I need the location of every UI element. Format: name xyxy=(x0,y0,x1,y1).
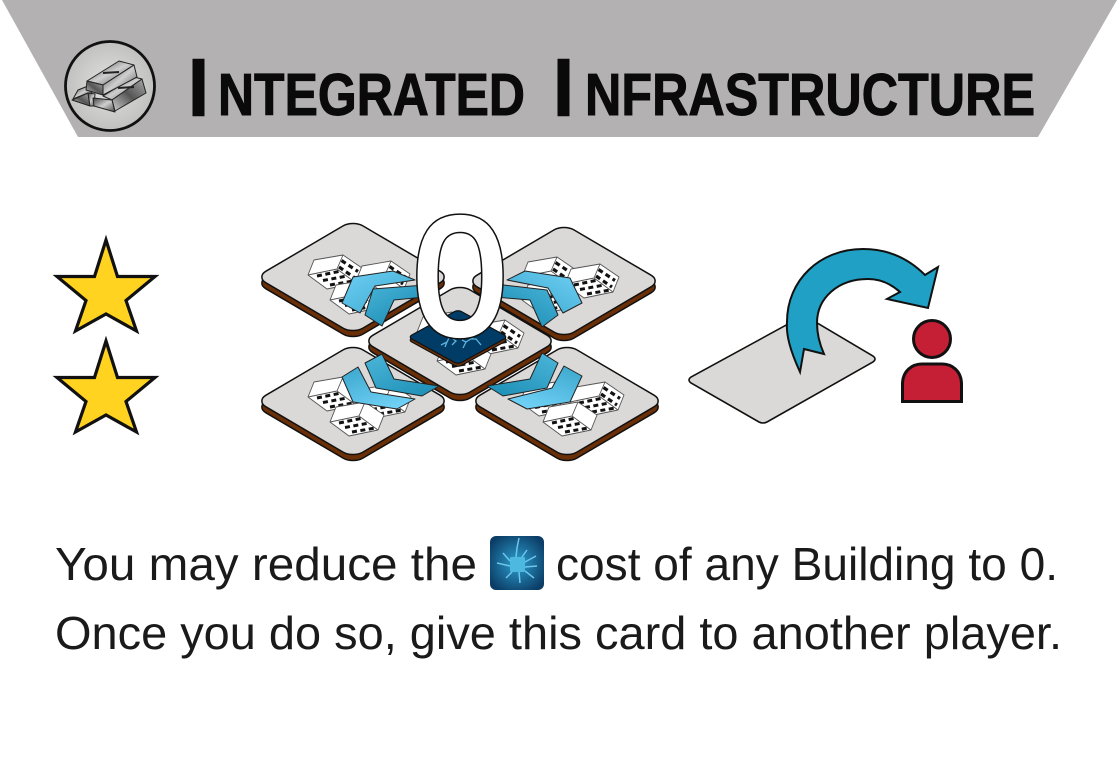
chip token xyxy=(408,310,508,367)
icon: microchip xyxy=(490,536,544,590)
building tiles with cost reduction arrows xyxy=(256,184,664,464)
icon: two gold stars xyxy=(57,240,155,432)
card xyxy=(689,316,875,423)
rule text: Once you do so, give this card to another player. xyxy=(55,607,1062,659)
tile: bottom right xyxy=(470,344,664,464)
title banner xyxy=(2,0,1117,137)
card with pass arrow xyxy=(689,249,938,423)
chevron arrows: top left xyxy=(342,271,425,326)
rule text: cost of any Building to 0. xyxy=(556,538,1058,590)
title xyxy=(189,43,1035,132)
tile: bottom left xyxy=(256,344,450,464)
chevron arrows: top right xyxy=(495,271,582,327)
curved arrow xyxy=(787,249,938,372)
tile: top left xyxy=(256,220,450,340)
title: I xyxy=(554,43,573,132)
title: NTEGRATED xyxy=(218,62,525,128)
chevron arrows: bottom right xyxy=(487,353,582,409)
title: NFRASTRUCTURE xyxy=(585,62,1035,128)
tile: center xyxy=(363,284,557,404)
rule text: You may reduce the xyxy=(55,538,477,590)
icon: silver ingots xyxy=(66,42,154,130)
big zero xyxy=(414,184,506,370)
chevron arrows: bottom left xyxy=(342,354,439,409)
title: I xyxy=(189,43,208,132)
rule text xyxy=(55,536,1062,659)
tile: top right xyxy=(467,224,661,344)
icon: player xyxy=(902,320,962,402)
